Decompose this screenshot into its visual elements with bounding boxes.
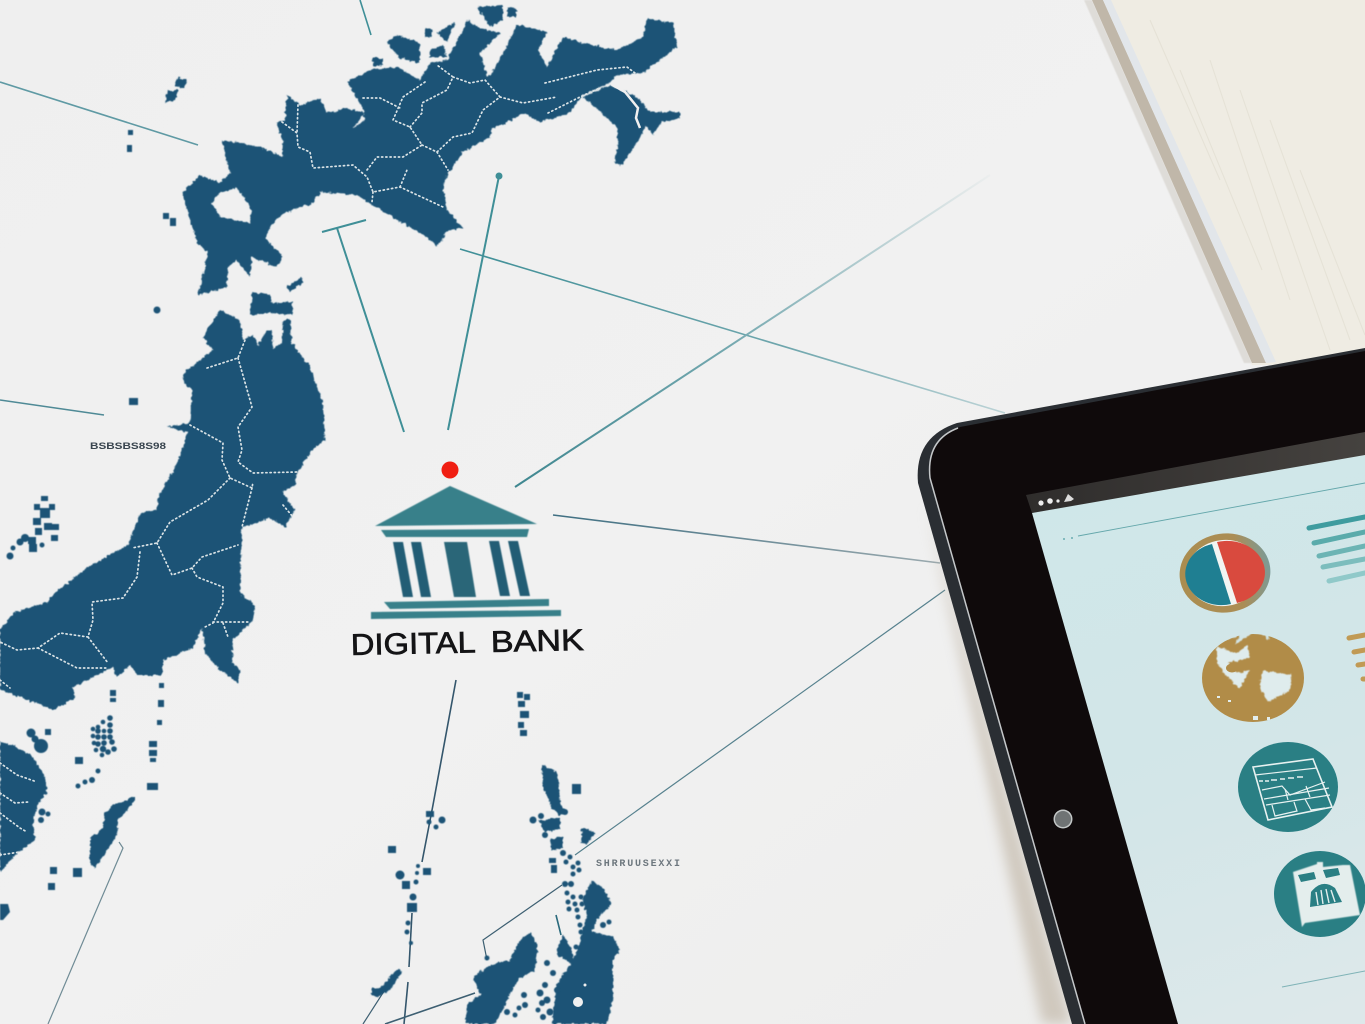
red location dot bbox=[442, 462, 458, 478]
status bar bbox=[1026, 432, 1365, 513]
north-east peninsula bbox=[583, 85, 680, 165]
white slits in peninsula bbox=[573, 84, 640, 1007]
southern island mass left bbox=[465, 932, 538, 1024]
teal list bars bbox=[1309, 517, 1365, 581]
northern coastal islets bbox=[387, 35, 420, 63]
map: prefecture borders bbox=[0, 65, 635, 855]
main island bbox=[0, 310, 325, 710]
title: DIGITAL BANK: DIGITAL bbox=[350, 626, 476, 662]
grid island cluster bbox=[91, 715, 117, 757]
label: garbled west map caption: BSBSBS8S98 bbox=[90, 441, 166, 452]
tablet body bbox=[918, 348, 1365, 1024]
map: small island dots bbox=[0, 130, 612, 1020]
title: DIGITAL BANK bbox=[350, 624, 584, 662]
icon: document map bbox=[1238, 742, 1338, 832]
tablet shadow bbox=[925, 500, 1072, 1024]
wood tabletop corner bbox=[1084, 0, 1365, 365]
connector lines bbox=[0, 0, 1005, 1024]
roof bbox=[375, 486, 537, 526]
southern island mass right bbox=[552, 880, 620, 1024]
screen header rule bbox=[1078, 483, 1365, 536]
icon: bank building bbox=[371, 486, 561, 619]
elongated southern island bbox=[542, 765, 567, 815]
icon: globe bbox=[1202, 632, 1304, 722]
tablet bbox=[918, 348, 1365, 1024]
label: garbled south map caption: SHRRUUSEXXI bbox=[596, 859, 680, 870]
columns bbox=[393, 541, 530, 597]
south-west island bbox=[0, 742, 47, 872]
left south chain bbox=[426, 811, 434, 817]
gold list bars bbox=[1349, 635, 1365, 679]
tablet screen bbox=[1032, 455, 1365, 1024]
icon: pie chart bbox=[1174, 528, 1276, 618]
title: DIGITAL BANK: BANK bbox=[490, 624, 584, 659]
screen footer rule bbox=[1282, 971, 1365, 987]
entablature bbox=[381, 529, 529, 537]
home button bbox=[1054, 810, 1072, 828]
steps bbox=[384, 599, 549, 609]
icon: bank tile bbox=[1274, 851, 1365, 937]
south chain bbox=[517, 692, 523, 698]
map: Japan archipelago bbox=[0, 5, 680, 1024]
northern island bbox=[182, 18, 677, 295]
